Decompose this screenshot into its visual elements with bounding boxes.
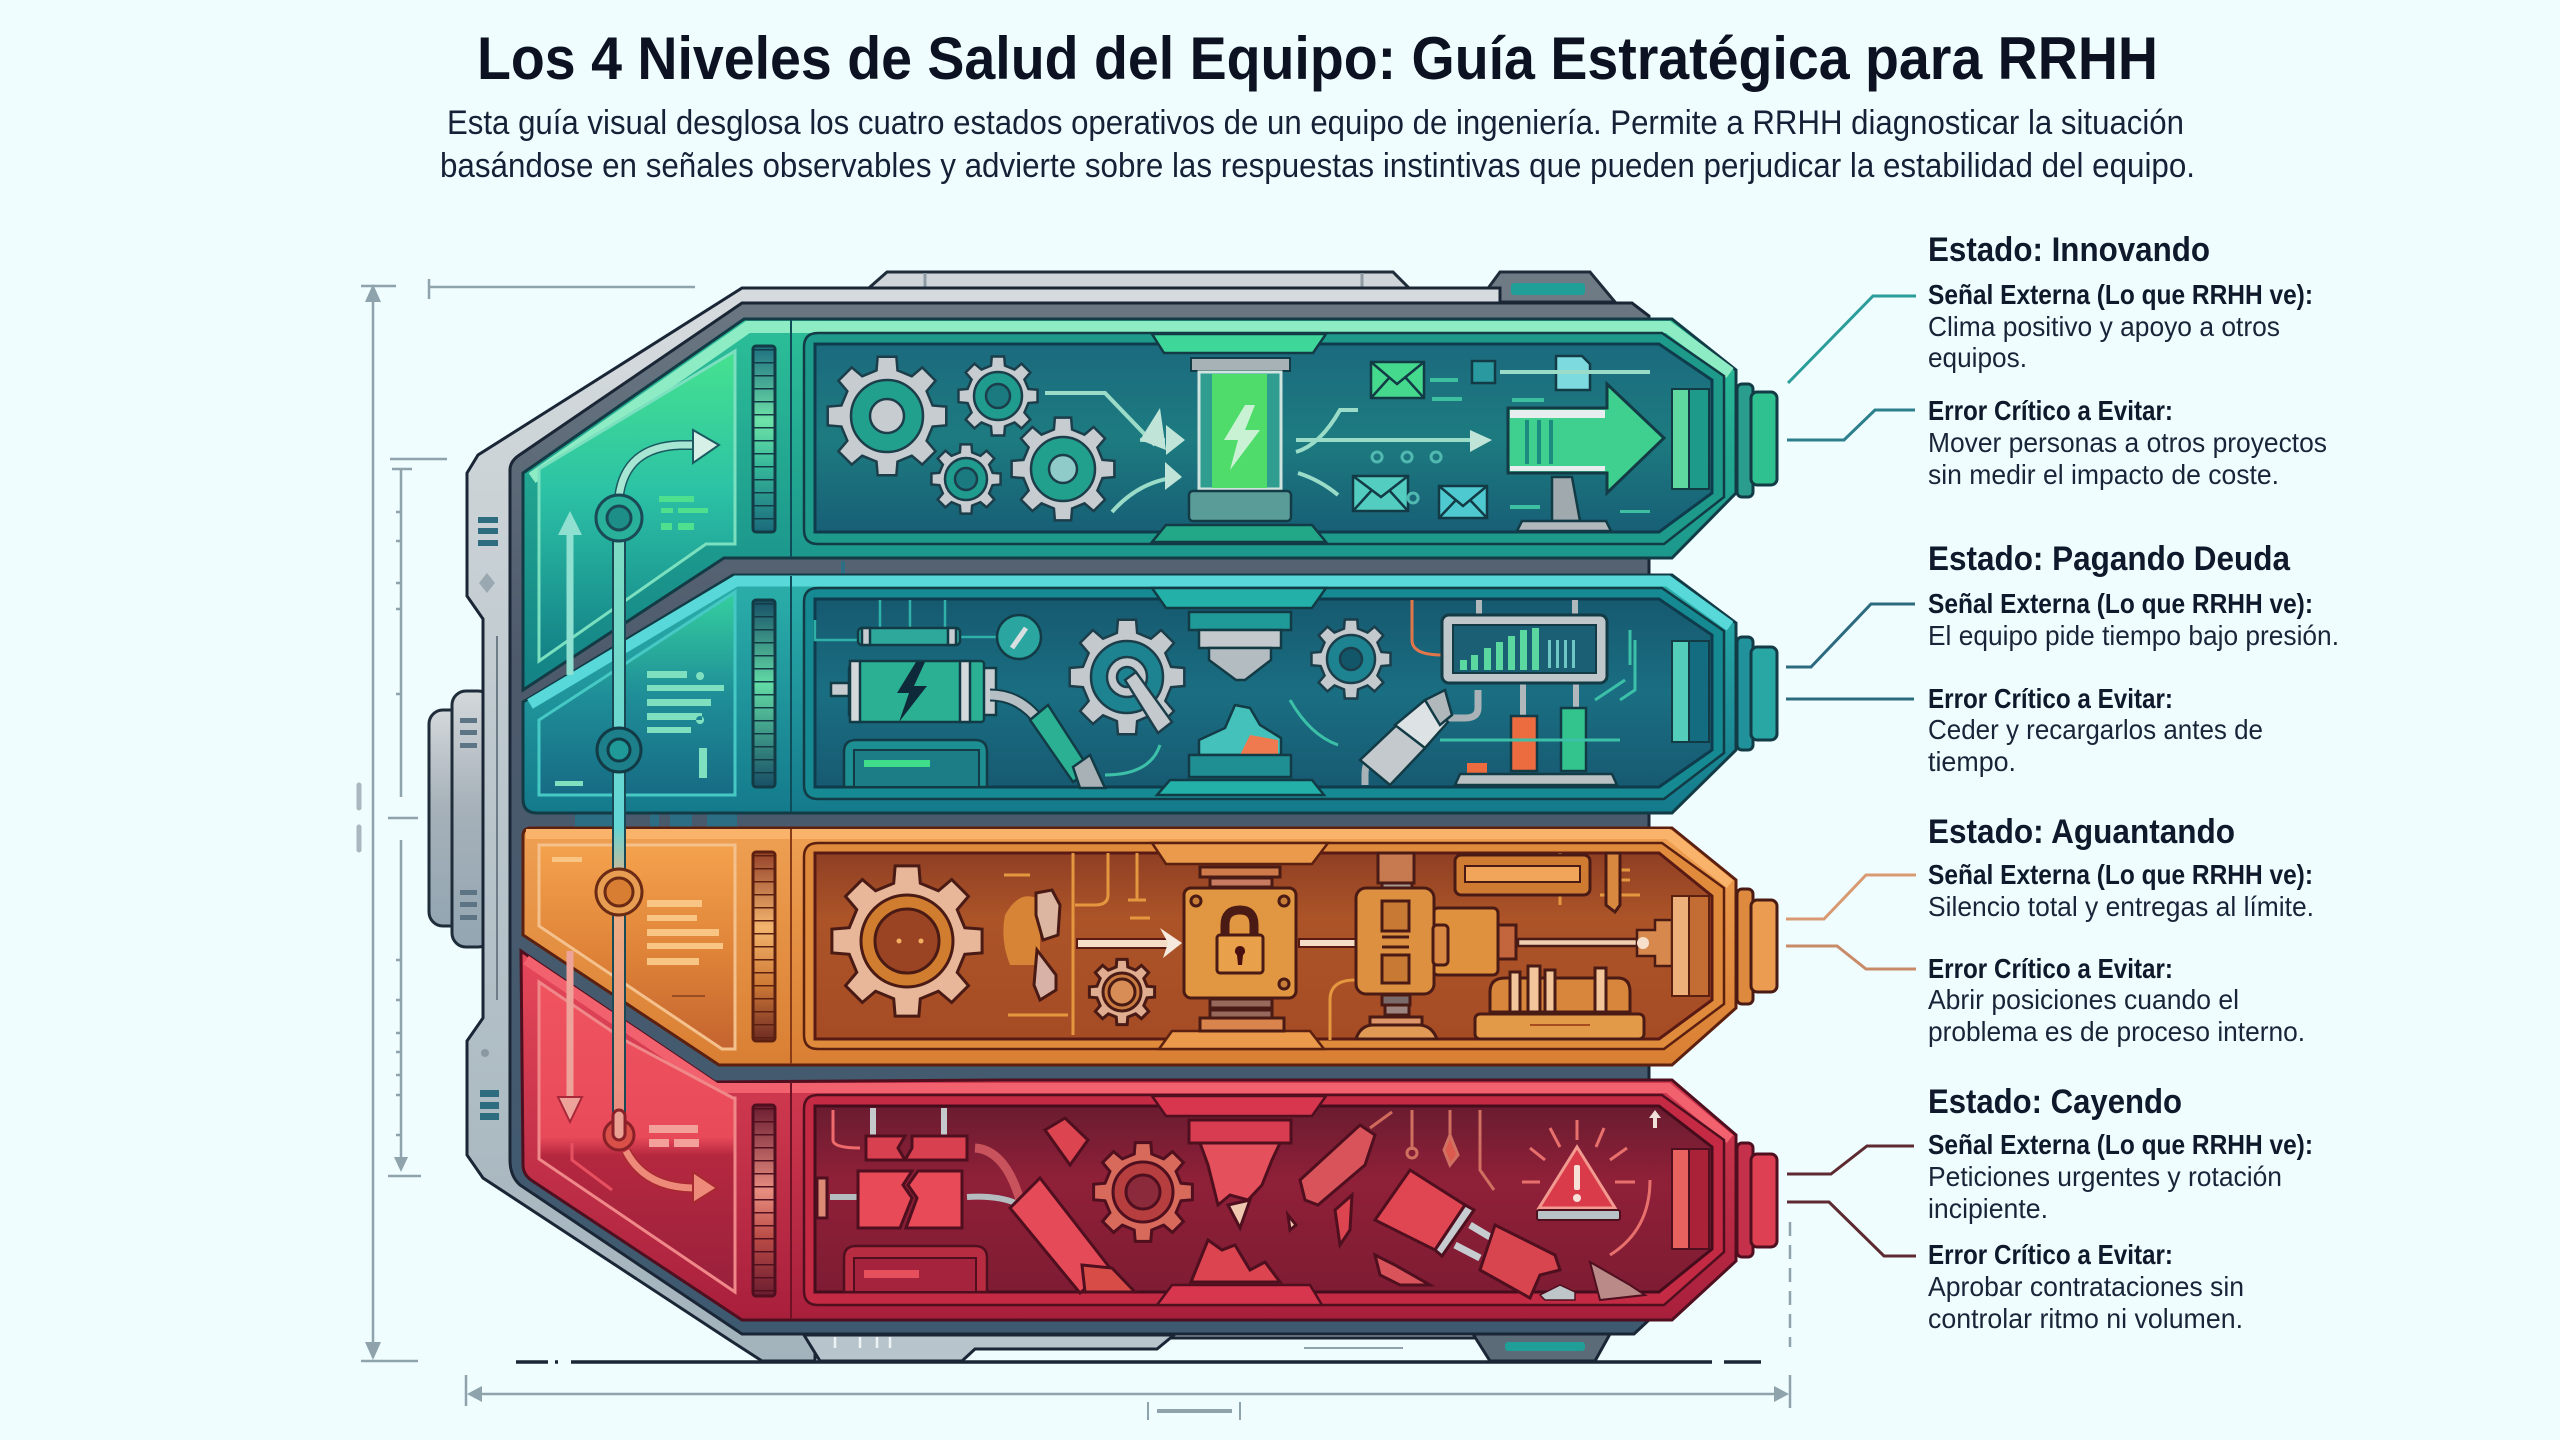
text block: cayendo: controlar ritmo ni volumen. bbox=[1928, 1303, 2243, 1334]
top vent bbox=[1455, 853, 1620, 912]
press head bbox=[1189, 612, 1291, 777]
connector: innovando signal bbox=[1788, 296, 1916, 383]
roller bench bbox=[1475, 966, 1644, 1039]
broken piston bbox=[1375, 1170, 1645, 1300]
end knob bbox=[1737, 1143, 1777, 1257]
subtitle: basándose en señales observables y advierte sobre las respuestas instintivas que pueden perjudicar la estabilidad del equipo. bbox=[440, 147, 2195, 185]
box bbox=[844, 1246, 987, 1292]
end bar bbox=[1672, 1149, 1709, 1249]
bottom tabs bbox=[804, 1334, 1610, 1361]
arrow: curve up to right bbox=[619, 430, 719, 497]
text block: innovando: Señal Externa (Lo que RRHH ve): bbox=[1928, 279, 2313, 310]
node orange bbox=[596, 869, 642, 915]
panel body bbox=[523, 575, 1736, 813]
text block: innovando: Clima positivo y apoyo a otros bbox=[1928, 311, 2280, 342]
trapezoids bbox=[1152, 1096, 1326, 1305]
text block: aguantando: Abrir posiciones cuando el bbox=[1928, 984, 2239, 1015]
small gear bbox=[1089, 959, 1155, 1025]
connector: innovando error bbox=[1787, 410, 1915, 440]
title: Los 4 Niveles de Salud del Equipo: Guía Estratégica para RRHH bbox=[477, 25, 2158, 92]
text block: innovando: Estado: Innovando bbox=[1928, 231, 2210, 269]
monitor bbox=[1412, 600, 1607, 716]
stripes bbox=[753, 346, 775, 532]
left screen bbox=[539, 351, 735, 661]
text block: pagando deuda: Ceder y recargarlos antes de bbox=[1928, 714, 2263, 745]
end knob bbox=[1737, 384, 1777, 497]
text block: aguantando: Silencio total y entregas al límite. bbox=[1928, 891, 2314, 922]
gear bbox=[832, 866, 982, 1016]
text block: innovando: sin medir el impacto de coste. bbox=[1928, 459, 2279, 490]
hanging parts bbox=[1407, 1110, 1494, 1190]
broken press bbox=[1189, 1120, 1296, 1230]
display bbox=[804, 843, 1724, 1049]
text block: cayendo: Peticiones urgentes y rotación bbox=[1928, 1161, 2282, 1192]
fallen cylinder bbox=[1010, 1178, 1135, 1293]
panel body bbox=[521, 951, 1736, 1320]
broken piece bbox=[1003, 890, 1060, 1000]
text block: innovando bbox=[1928, 231, 2327, 490]
text block: innovando: equipos. bbox=[1928, 342, 2027, 373]
arrow to lock bbox=[1077, 928, 1182, 958]
warning triangle bbox=[1522, 1110, 1661, 1255]
ground line bbox=[516, 1360, 1761, 1364]
connector: cayendo error bbox=[1787, 1202, 1916, 1256]
screen readout bbox=[555, 671, 724, 786]
text block: aguantando bbox=[1928, 813, 2314, 1047]
circuit lines bbox=[1004, 853, 1640, 1040]
text block: aguantando: Señal Externa (Lo que RRHH ve): bbox=[1928, 859, 2313, 890]
broken pipes bbox=[833, 1108, 1020, 1200]
rail bbox=[613, 518, 625, 1134]
text block: aguantando: problema es de proceso interno. bbox=[1928, 1016, 2305, 1047]
arrow: down bbox=[558, 951, 582, 1122]
text block: cayendo: Error Crítico a Evitar: bbox=[1928, 1239, 2173, 1270]
lock block bbox=[1184, 867, 1296, 1031]
rail with nodes bbox=[558, 430, 719, 1203]
display bbox=[804, 333, 1724, 544]
dark frame bbox=[510, 303, 1649, 1334]
connector: cayendo signal bbox=[1787, 1146, 1914, 1174]
text block: cayendo: Señal Externa (Lo que RRHH ve): bbox=[1928, 1129, 2313, 1160]
floating shard bbox=[1045, 1118, 1088, 1165]
dial bbox=[997, 615, 1041, 659]
long rod and cap bbox=[1518, 920, 1672, 966]
display bbox=[804, 588, 1724, 799]
flow arrows bbox=[1045, 372, 1650, 513]
screen readout bbox=[552, 857, 723, 965]
level bars bbox=[1455, 708, 1617, 785]
end knob bbox=[1737, 889, 1777, 1004]
display bbox=[804, 1095, 1724, 1305]
connector: pagando error bbox=[1786, 698, 1914, 700]
text block: aguantando: Estado: Aguantando bbox=[1928, 813, 2235, 851]
text block: pagando deuda: Error Crítico a Evitar: bbox=[1928, 683, 2173, 714]
panel: green innovando bbox=[523, 319, 1777, 690]
big arrow bbox=[1508, 384, 1664, 531]
text block: cayendo bbox=[1928, 1083, 2313, 1334]
end bar bbox=[1672, 389, 1709, 489]
text block: pagando deuda bbox=[1928, 540, 2339, 777]
node teal bbox=[597, 728, 641, 772]
connector: pagando signal bbox=[1786, 604, 1915, 667]
stripes bbox=[753, 600, 775, 787]
stripes bbox=[753, 1105, 775, 1296]
text block: innovando: Mover personas a otros proyectos bbox=[1928, 427, 2327, 458]
node green bbox=[596, 495, 642, 541]
text block: cayendo: incipiente. bbox=[1928, 1193, 2048, 1224]
arrow: up bbox=[558, 511, 582, 675]
rod bbox=[1299, 939, 1357, 947]
text block: pagando deuda: Señal Externa (Lo que RRHH ve): bbox=[1928, 588, 2313, 619]
node red bbox=[604, 1110, 634, 1150]
subtitle: Esta guía visual desglosa los cuatro estados operativos de un equipo de ingeniería. Permite a RRHH diagnosticar la situación bbox=[447, 104, 2184, 142]
subtitle bbox=[440, 104, 2195, 185]
debris bbox=[1191, 1112, 1430, 1285]
panel: teal pagando deuda bbox=[523, 575, 1777, 813]
top tabs bbox=[853, 272, 1615, 302]
text block: cayendo: Aprobar contrataciones sin bbox=[1928, 1271, 2244, 1302]
small flow marks bbox=[1105, 630, 1635, 775]
panel: red cayendo bbox=[521, 951, 1777, 1320]
end knob bbox=[1737, 637, 1777, 750]
text block: cayendo: Estado: Cayendo bbox=[1928, 1083, 2182, 1121]
cracked cylinder bbox=[817, 1171, 1020, 1228]
gears bbox=[828, 356, 1114, 520]
connector: aguantando signal bbox=[1786, 875, 1916, 919]
dimension lines bbox=[359, 279, 1790, 1420]
text block: pagando deuda: El equipo pide tiempo bajo presión. bbox=[1928, 620, 2339, 651]
gears bbox=[1070, 619, 1391, 734]
end bar bbox=[1672, 896, 1709, 996]
text block: aguantando: Error Crítico a Evitar: bbox=[1928, 953, 2173, 984]
screen marks bbox=[649, 1125, 699, 1147]
panel body bbox=[523, 319, 1736, 690]
cable bbox=[990, 695, 1105, 788]
arrow: curve down to right bbox=[626, 1151, 717, 1203]
screen readout bbox=[659, 496, 708, 530]
box bbox=[844, 740, 987, 787]
frame connectors bbox=[575, 561, 845, 827]
text block: pagando deuda: Estado: Pagando Deuda bbox=[1928, 540, 2291, 578]
left screen bbox=[539, 845, 735, 1049]
panel: orange aguantando bbox=[523, 828, 1777, 1065]
panel body bbox=[523, 828, 1736, 1065]
text block: pagando deuda: tiempo. bbox=[1928, 746, 2016, 777]
trapezoids bbox=[1152, 588, 1326, 795]
side knobs bbox=[429, 691, 492, 947]
battery bbox=[815, 600, 1000, 722]
press bbox=[1152, 334, 1326, 542]
left screen bbox=[539, 982, 735, 1292]
trapezoids bbox=[1152, 843, 1328, 1049]
stripes bbox=[753, 852, 775, 1041]
machine bbox=[1356, 853, 1516, 1039]
gear bbox=[1094, 1143, 1192, 1241]
plug bbox=[1360, 690, 1478, 785]
end bar bbox=[1672, 641, 1709, 742]
text block: innovando: Error Crítico a Evitar: bbox=[1928, 395, 2173, 426]
envelopes bbox=[1353, 356, 1590, 518]
chassis bbox=[467, 288, 1500, 1361]
connector: aguantando error bbox=[1786, 946, 1916, 969]
chassis vents bbox=[478, 517, 499, 1120]
left screen bbox=[539, 592, 735, 795]
